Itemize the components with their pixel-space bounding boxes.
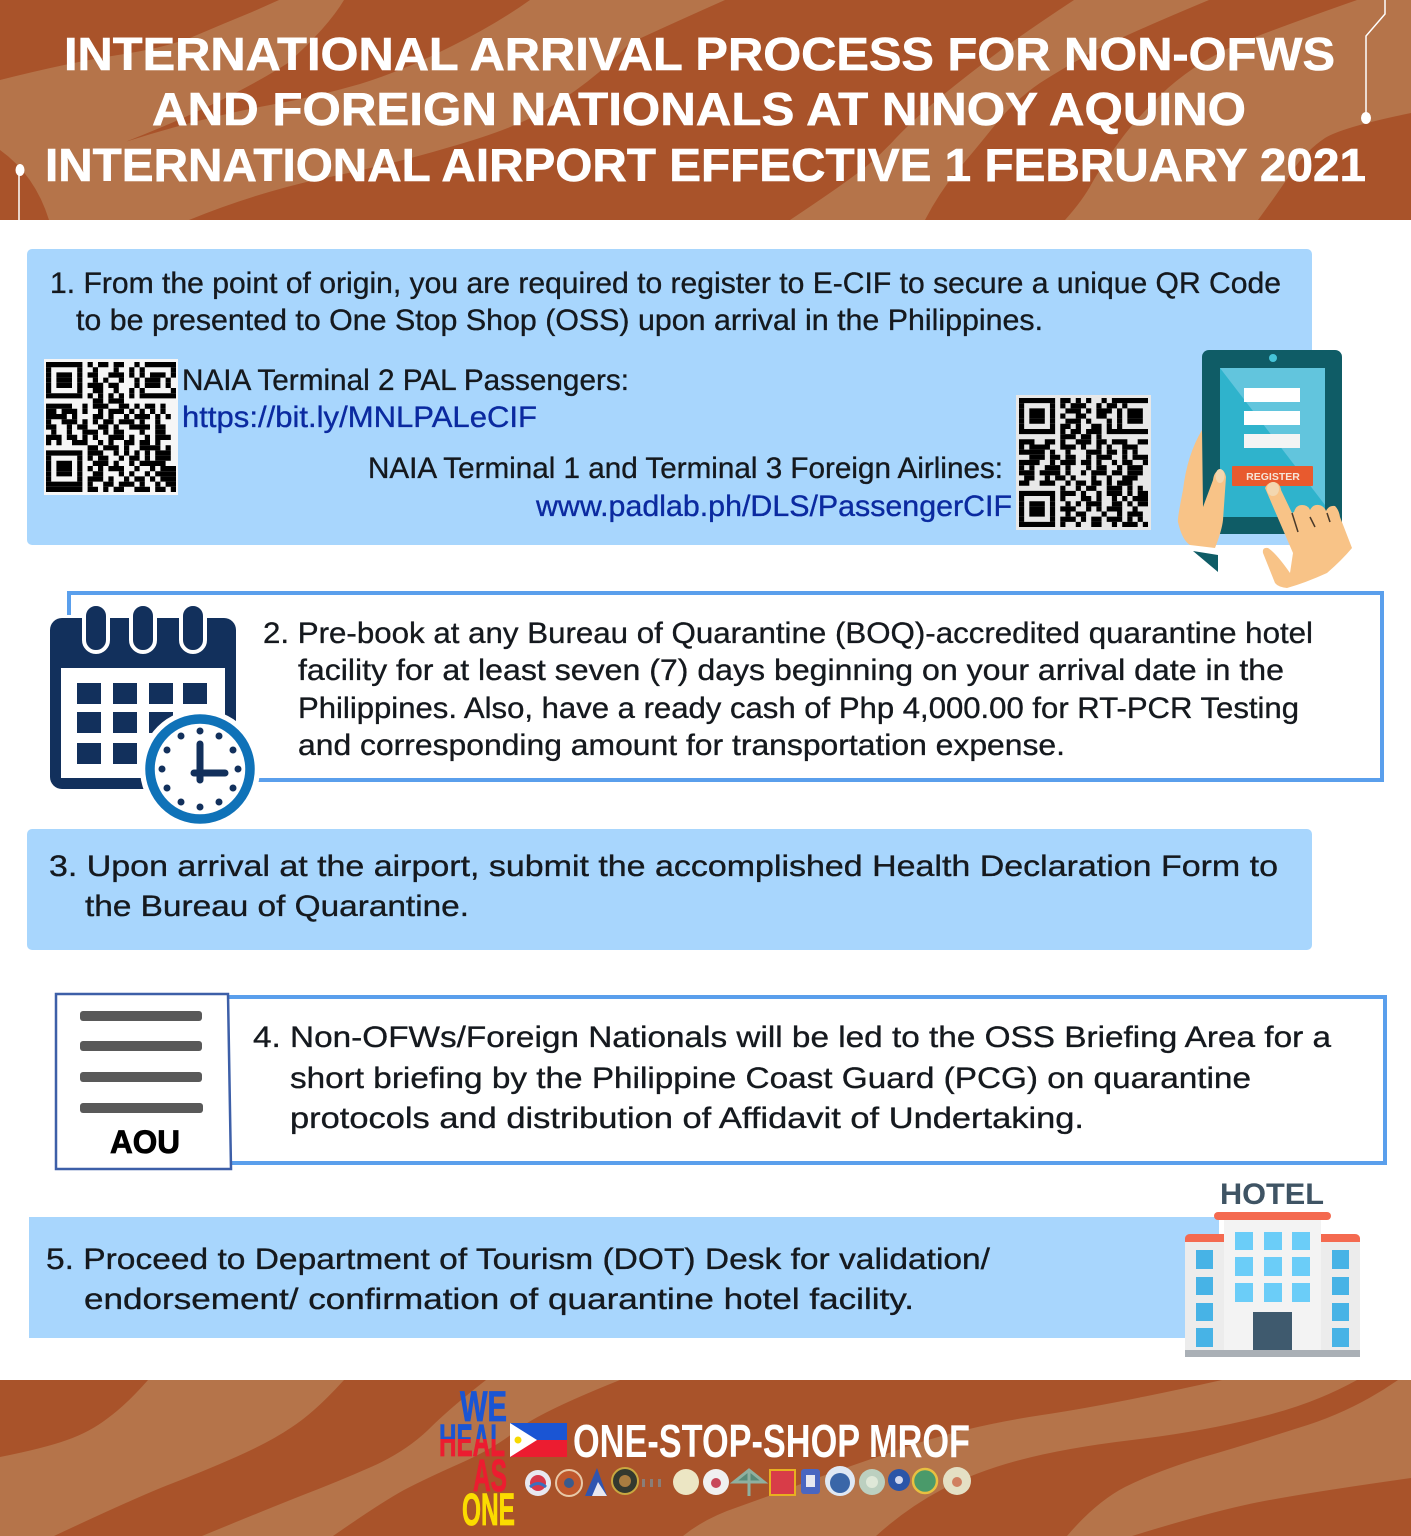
step 5 text [46, 1243, 991, 1316]
title: INTERNATIONAL ARRIVAL PROCESS FOR NON-OFWS [64, 28, 1335, 80]
register button [1232, 466, 1313, 486]
step 3 text: the Bureau of Quarantine. [85, 890, 469, 923]
agency logos row [525, 1466, 971, 1496]
terminal 1 and 3 details: NAIA Terminal 1 and Terminal 3 Foreign Airlines: [368, 452, 1003, 485]
step 4 text: protocols and distribution of Affidavit of Undertaking. [290, 1102, 1084, 1135]
We Heal As One logo: HEAL [439, 1415, 505, 1466]
step 3 text: 3. Upon arrival at the airport, submit the accomplished Health Declaration Form to [49, 850, 1278, 883]
panel: step 1 register to E-CIF [27, 249, 1312, 545]
panel: step 5 DOT desk [29, 1217, 1219, 1338]
right hand [1263, 482, 1352, 588]
terminal 2 details [182, 364, 629, 434]
We Heal As One logo: AS [473, 1450, 507, 1501]
terminal 2 details: NAIA Terminal 2 PAL Passengers: [182, 364, 629, 397]
title: INTERNATIONAL AIRPORT EFFECTIVE 1 FEBRUARY 2021 [45, 139, 1366, 191]
icon: tablet with register form [1178, 350, 1352, 588]
We Heal As One logo: WE [460, 1383, 507, 1431]
terminal 1 and 3 details [368, 452, 1012, 523]
step 1 text: 1. From the point of origin, you are required to register to E-CIF to secure a unique QR Code [50, 267, 1281, 300]
terminal 1 and 3 details: www.padlab.ph/DLS/PassengerCIF [535, 490, 1012, 523]
step 5 text: endorsement/ confirmation of quarantine hotel facility. [84, 1283, 914, 1316]
QR code: terminal 2 [44, 359, 178, 495]
icon: Philippine flag [510, 1423, 567, 1457]
title: AND FOREIGN NATIONALS AT NINOY AQUINO [152, 83, 1246, 135]
step 3 text [49, 850, 1278, 923]
left hand [1178, 430, 1226, 572]
header banner [0, 0, 1411, 220]
panel: step 4 OSS briefing [229, 997, 1385, 1163]
We Heal As One logo: ONE [462, 1484, 515, 1535]
We Heal As One logo: HEAL [439, 1415, 505, 1466]
step 4 text: 4. Non-OFWs/Foreign Nationals will be led to the OSS Briefing Area for a [253, 1021, 1331, 1054]
icon: AOU document: AOU [110, 1124, 180, 1160]
step 2 text: Philippines. Also, have a ready cash of Php 4,000.00 for RT-PCR Testing [298, 692, 1299, 725]
step 2 text: and corresponding amount for transportation expense. [298, 729, 1065, 762]
footer heading: ONE-STOP-SHOP MROF [573, 1415, 970, 1467]
panel: step 3 health declaration [27, 829, 1312, 950]
step 4 text [253, 1021, 1331, 1135]
icon: AOU document [56, 994, 231, 1169]
clock [140, 709, 260, 829]
step 2 text: facility for at least seven (7) days beginning on your arrival date in the [298, 654, 1284, 687]
icon: hotel [1185, 1178, 1360, 1357]
icon: hotel: HOTEL [1220, 1178, 1324, 1211]
We Heal As One logo [440, 1391, 514, 1526]
QR code: terminals 1 and 3 [1016, 395, 1151, 530]
step 2 text: 2. Pre-book at any Bureau of Quarantine (BOQ)-accredited quarantine hotel [263, 617, 1313, 650]
icon: calendar with clock [50, 604, 260, 829]
step 1 text: to be presented to One Stop Shop (OSS) upon arrival in the Philippines. [76, 304, 1043, 337]
register button: REGISTER [1246, 471, 1300, 483]
header circuit decoration [16, 0, 1385, 220]
step 5 text: 5. Proceed to Department of Tourism (DOT) Desk for validation/ [46, 1243, 991, 1276]
step 1 text [50, 267, 1281, 337]
step 2 text [263, 617, 1313, 762]
step 4 text: short briefing by the Philippine Coast Guard (PCG) on quarantine [290, 1062, 1251, 1095]
footer banner [0, 1380, 1411, 1536]
panel: step 2 pre-book hotel [69, 593, 1382, 780]
terminal 2 details: https://bit.ly/MNLPALeCIF [182, 401, 537, 434]
title [45, 28, 1366, 191]
